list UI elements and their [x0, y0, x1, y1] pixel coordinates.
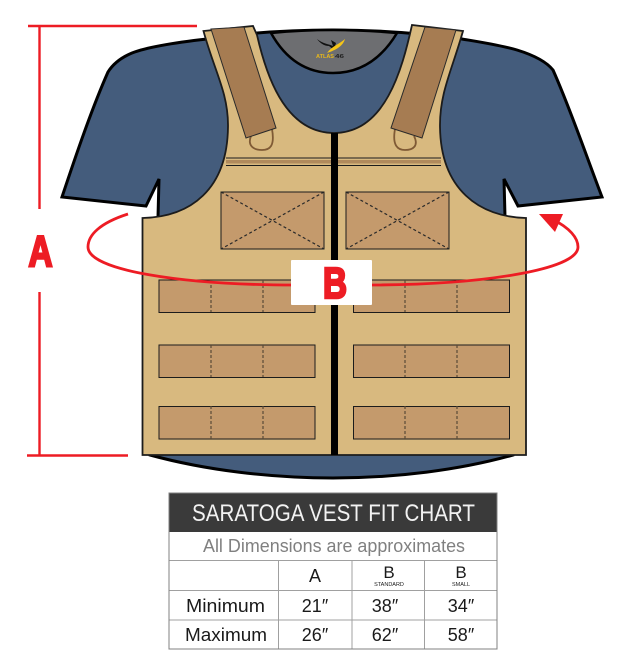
logo: Atlas 46: ATLAS — [316, 54, 334, 60]
webbing: right column of three rows — [354, 280, 510, 439]
strap: right shoulder — [391, 27, 456, 138]
logo: Atlas 46: 46 — [335, 54, 344, 60]
chest band — [226, 158, 441, 166]
column headers — [309, 563, 470, 588]
row: minimum: 38″ — [372, 596, 399, 616]
d-ring: left — [250, 129, 273, 150]
table border — [169, 493, 497, 649]
row: minimum: Minimum — [186, 596, 265, 616]
row: maximum: 62″ — [372, 625, 399, 645]
strap: left shoulder — [211, 27, 276, 138]
column headers: B — [455, 563, 467, 582]
column headers: SMALL — [452, 582, 470, 588]
dimension A: height bracket — [27, 26, 197, 456]
row: minimum: 34″ — [448, 596, 475, 616]
table subtitle: All Dimensions are approximates — [203, 536, 465, 556]
row: maximum: 58″ — [448, 625, 475, 645]
shirt: blue t-shirt body and sleeves — [62, 30, 602, 478]
fit chart table — [169, 493, 497, 649]
webbing: left column of three rows — [159, 280, 315, 439]
dimension B: girth arc with arrow — [88, 214, 578, 285]
column headers: STANDARD — [374, 582, 404, 588]
row: minimum: 21″ — [302, 596, 329, 616]
label A: A — [28, 227, 52, 276]
logo: Atlas 46 — [316, 39, 345, 60]
column headers: B — [383, 563, 395, 582]
row: maximum — [185, 625, 475, 645]
table header: SARATOGA VEST FIT CHART — [192, 500, 475, 527]
shirt collar: grey neck label area — [271, 30, 397, 73]
row: maximum: Maximum — [185, 625, 267, 645]
vest: tan body — [142, 25, 526, 455]
zipper: centre black strip — [331, 133, 338, 455]
label B: white box: B — [323, 259, 347, 308]
table header — [169, 493, 497, 532]
pocket: left chest — [221, 192, 324, 249]
d-ring: right — [394, 129, 416, 150]
column headers: A — [309, 566, 321, 586]
row: maximum: 26″ — [302, 625, 329, 645]
pocket: right chest — [346, 192, 449, 249]
row: minimum — [186, 596, 475, 616]
label B: white box — [291, 259, 372, 308]
table grid — [169, 560, 497, 649]
